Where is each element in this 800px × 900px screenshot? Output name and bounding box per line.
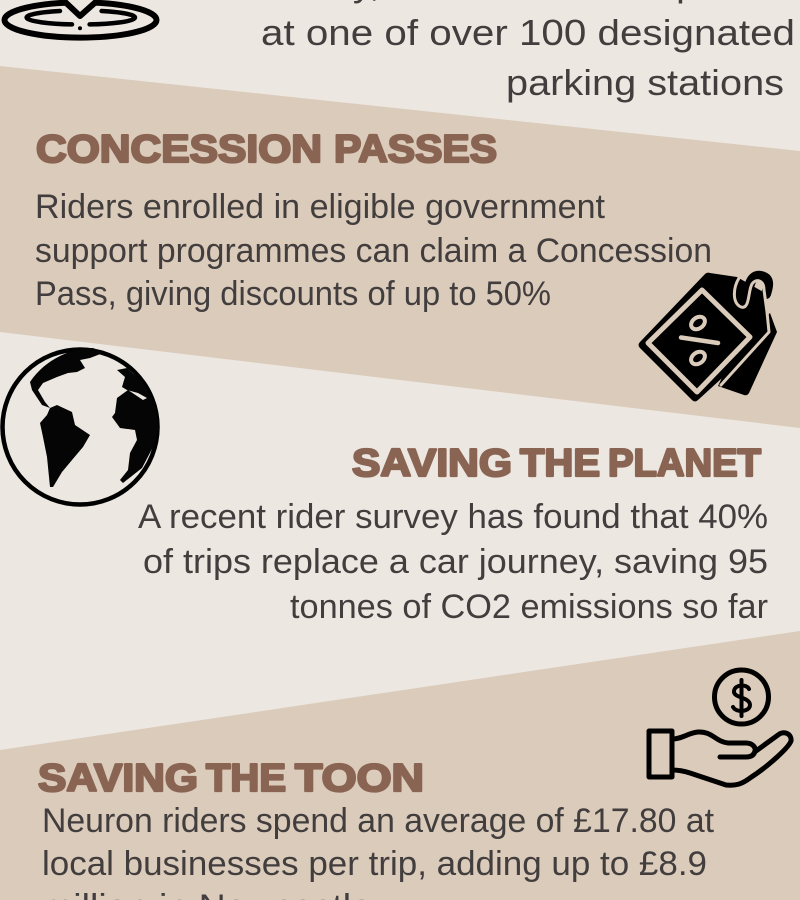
heading: saving the toon: TOON: [295, 757, 424, 800]
text: parking stations: at one of over 100 designated: [261, 12, 795, 53]
panel: concession passes band: [0, 66, 800, 428]
text: saving the toon body: Neuron riders spend an average of £17.80 at: [42, 802, 715, 840]
text: parking stations: [260, 0, 795, 103]
text: saving the planet body: tonnes of CO2 emissions so far: [290, 588, 768, 626]
heading: saving the planet: [352, 442, 761, 485]
heading: saving the toon: [38, 757, 424, 800]
heading: concession passes: PASSES: [334, 128, 497, 171]
panel: saving the toon band: [0, 631, 800, 900]
icon: hand holding coin: [649, 670, 791, 785]
text: saving the toon body: [42, 802, 715, 900]
text: concession passes body: [35, 188, 712, 313]
icon: parking station: [4, 0, 156, 38]
icon: discount tags: [638, 273, 777, 402]
heading: saving the planet: PLANET: [608, 442, 761, 485]
heading: concession passes: [36, 128, 497, 171]
text: concession passes body: support programmes can claim a Concession: [35, 232, 712, 270]
text: saving the toon body: local businesses per trip, adding up to £8.9: [42, 845, 707, 883]
heading: saving the toon: THE: [206, 757, 286, 800]
heading: saving the planet: SAVING: [352, 442, 512, 485]
heading: concession passes: CONCESSION: [36, 128, 322, 171]
heading: saving the planet: THE: [520, 442, 600, 485]
heading: saving the toon: SAVING: [38, 757, 198, 800]
text: parking stations: parking stations: [506, 62, 784, 103]
text: concession passes body: Pass, giving discounts of up to 50%: [35, 275, 551, 313]
text: saving the planet body: of trips replace a car journey, saving 95: [143, 543, 768, 581]
text: saving the planet body: [138, 498, 768, 626]
icon: globe: [2, 348, 159, 504]
text: concession passes body: Riders enrolled in eligible government: [35, 188, 606, 226]
text: saving the planet body: A recent rider survey has found that 40%: [138, 498, 768, 536]
